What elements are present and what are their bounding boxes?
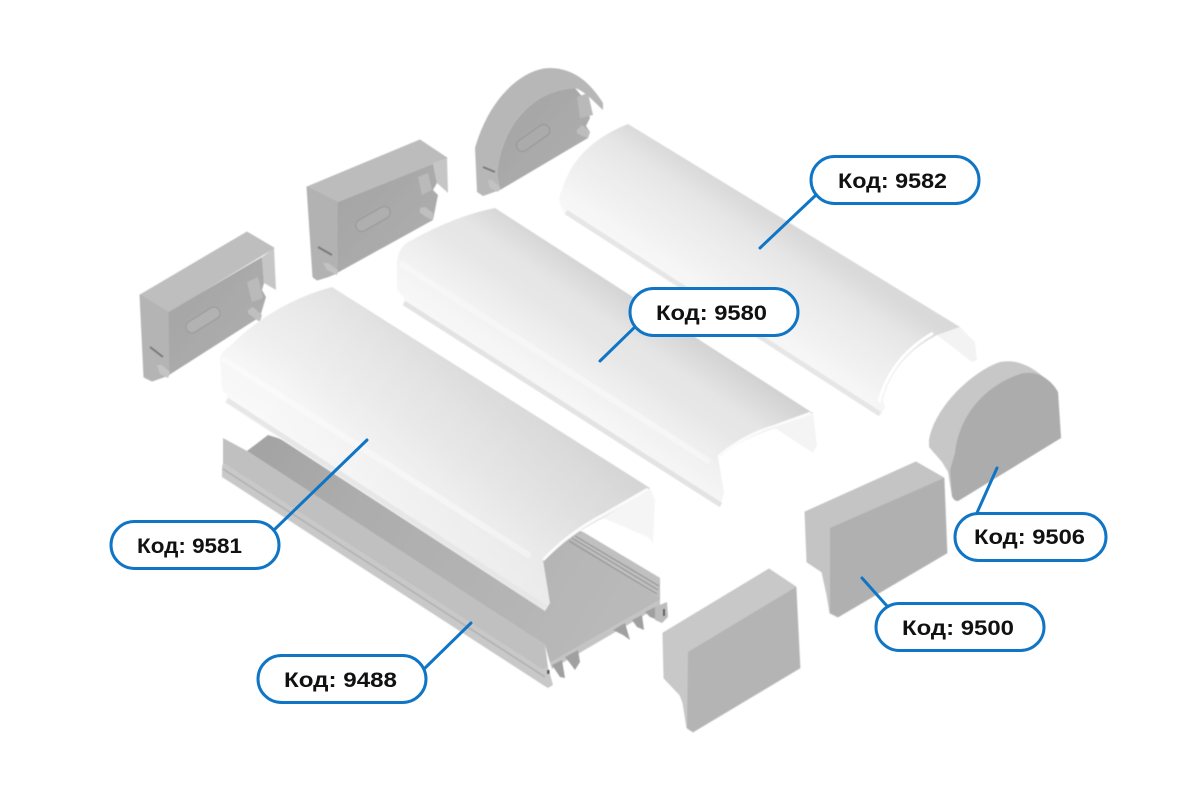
profile side wall <box>223 438 548 670</box>
end cap: front rectangular lower <box>663 569 800 732</box>
callout: 9500: Код: 9500 <box>902 617 1014 640</box>
callout: 9580: Код: 9580 <box>656 302 767 325</box>
callout: 9581: Код: 9581 <box>137 535 242 558</box>
lens cover 9581 <box>220 287 655 611</box>
callout: 9506 <box>955 468 1106 560</box>
callout: 9488: Код: 9488 <box>284 669 397 692</box>
profile floor <box>247 435 660 663</box>
callout: 9581 <box>111 440 367 568</box>
end cap: back half-round <box>475 68 603 196</box>
end cap: front rectangular 9500 <box>805 462 947 617</box>
callout: 9582 <box>760 156 979 248</box>
end cap: back left rectangular <box>140 232 276 381</box>
callout: 9582: Код: 9582 <box>838 170 947 193</box>
lens cover 9582 <box>559 124 977 416</box>
lens cover 9580 <box>397 208 817 507</box>
profile end face <box>550 600 660 669</box>
end cap: back middle rectangular <box>307 140 448 280</box>
callout: 9500 <box>862 578 1044 650</box>
aluminium profile 9488 <box>222 435 668 688</box>
callout: 9580 <box>600 288 798 361</box>
end cap: front half-round 9506 <box>929 361 1061 501</box>
callout: 9488 <box>258 623 471 702</box>
profile back wall <box>570 532 660 597</box>
callout: 9506: Код: 9506 <box>974 526 1085 549</box>
